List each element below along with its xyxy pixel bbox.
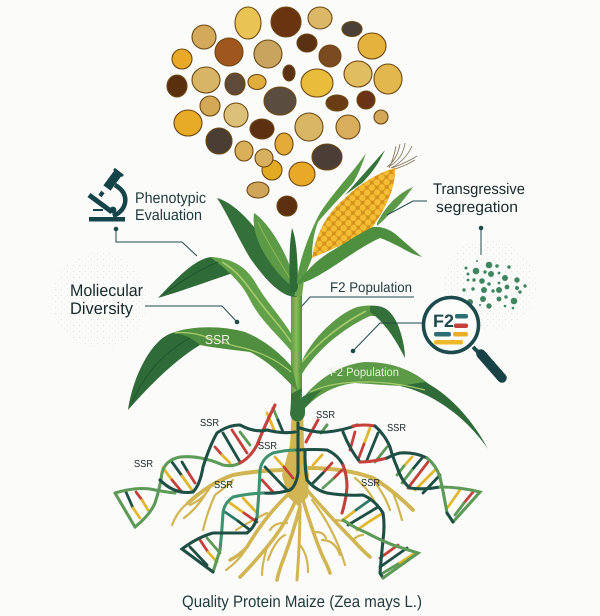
lower husk: [297, 227, 422, 284]
connector: magnifier: [351, 323, 422, 353]
heading: Moliecular Diversity: Diversity: [70, 299, 134, 318]
heading: Transgressive segregation: segregation: [436, 199, 518, 216]
label: F2 Population: F2 Population: [330, 279, 412, 295]
roots: [172, 405, 413, 580]
corn ear: [294, 143, 422, 296]
SSR labels on DNA: SSR: [258, 441, 277, 452]
connector: transgressive: [387, 201, 427, 215]
heading: Phenotypic Evaluation: Phenotypic: [135, 190, 206, 207]
connector: scatter: [479, 226, 483, 255]
heading: Moliecular Diversity: [70, 281, 143, 318]
seed cluster: [167, 7, 402, 216]
caption: Quality Protein Maize (Zea mays L.): [182, 593, 422, 611]
DNA base-pair rungs: [126, 408, 473, 573]
heading: Phenotypic Evaluation: Evaluation: [135, 207, 202, 224]
heading: Transgressive segregation: Transgressive: [433, 181, 525, 198]
SSR labels on DNA: SSR: [316, 410, 335, 421]
heading: Moliecular Diversity: Moliecular: [70, 281, 143, 300]
upper right leaf: [298, 306, 405, 374]
kernels: [312, 168, 395, 258]
magnifier icon: [424, 298, 502, 378]
dot scatter: [462, 260, 527, 309]
label: F2 Population on leaf: F2 Population: [330, 365, 399, 379]
SSR labels on DNA: SSR: [361, 478, 380, 489]
corn silk: [387, 143, 417, 170]
SSR labels on DNA: SSR: [214, 480, 233, 491]
stalk base: [290, 388, 322, 422]
DNA strands left: [115, 405, 295, 527]
outer husk: [297, 153, 366, 285]
SSR labels on DNA: SSR: [387, 423, 406, 434]
top left leaf: [217, 198, 298, 297]
stipple halo: molecular diversity: [52, 252, 148, 348]
microscope icon: [89, 169, 125, 222]
SSR labels on DNA: [134, 410, 406, 491]
stipple halo: scatter: [444, 239, 536, 331]
heading: Phenotypic Evaluation: [135, 190, 206, 224]
label: SSR on leaf: SSR: [205, 332, 230, 347]
lower right leaf: [296, 362, 488, 449]
connector: phenotypic: [114, 227, 197, 256]
DNA strands centre: [182, 423, 418, 578]
DNA strands right: [300, 425, 480, 522]
F2 text: F2: [433, 311, 454, 331]
heading: Transgressive segregation: [433, 181, 525, 216]
lower left leaf: [128, 327, 298, 410]
SSR labels on DNA: SSR: [134, 459, 153, 470]
SSR labels on DNA: SSR: [200, 418, 219, 429]
stalk: [291, 282, 302, 410]
maize plant: [128, 143, 488, 449]
connector: molecular diversity: [145, 306, 239, 324]
connector: F2 Population: [302, 297, 414, 306]
DNA double helices: [115, 405, 480, 578]
upper left leaf: [158, 257, 292, 352]
